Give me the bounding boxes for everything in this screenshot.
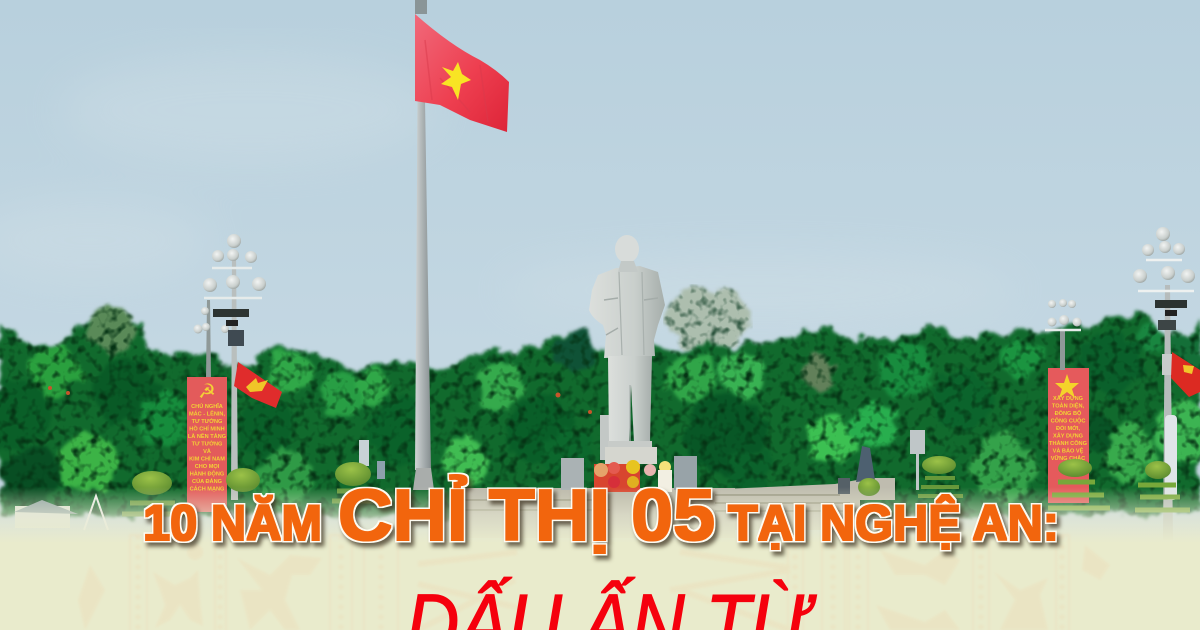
left red flag	[234, 362, 282, 408]
small lamps	[359, 430, 925, 490]
cream lower panel	[0, 542, 1200, 630]
left slogan banner: HỒ CHÍ MINH	[189, 424, 225, 432]
cream fade panel	[0, 487, 1200, 543]
left slogan banner: VÀ	[203, 448, 211, 455]
left slogan banner: HÀNH ĐỘNG	[190, 470, 224, 478]
right slogan banner	[1048, 368, 1089, 503]
right slogan banner: THÀNH CÔNG	[1049, 439, 1087, 447]
flagpole base	[413, 468, 434, 490]
right slogan banner: ĐỔI MỚI,	[1056, 424, 1080, 432]
right slogan banner: TOÀN DIỆN,	[1052, 402, 1085, 410]
title line one	[143, 475, 1059, 556]
left slogan banner: MÁC - LÊNIN,	[189, 410, 225, 418]
flowers at statue base	[594, 460, 672, 492]
deer and bird motifs	[78, 544, 1110, 630]
plaza and steps	[465, 478, 895, 538]
statue of President Ho Chi Minh	[589, 235, 665, 447]
orange blossoms	[48, 386, 592, 446]
left slogan banner: CHO MỌI	[195, 464, 220, 470]
title: 10 năm: 10 NĂM	[143, 495, 322, 551]
pale tree behind statue	[666, 288, 750, 348]
national flag	[415, 14, 509, 132]
topiary trees	[14, 456, 1190, 530]
drum bands	[130, 535, 1069, 630]
left slogan banner: LÀ NỀN TẢNG	[188, 433, 226, 440]
title: tại Nghệ An: TẠI NGHỆ AN:	[728, 495, 1059, 551]
main flagpole	[415, 100, 431, 470]
left slogan banner	[187, 377, 227, 512]
soft clouds	[0, 55, 1020, 325]
title: Chỉ thị 05: CHỈ THỊ 05	[338, 475, 715, 556]
left slogan banner: TƯ TƯỞNG	[192, 418, 222, 425]
small right lamp post	[1045, 299, 1082, 370]
star on banner	[1055, 374, 1079, 398]
right lamp post	[1133, 227, 1195, 540]
right slogan banner: VÀ BẢO VỆ	[1053, 446, 1084, 454]
left slogan banner: KIM CHỈ NAM	[189, 456, 225, 462]
drum band dots	[138, 535, 1062, 630]
small dark statue	[856, 446, 875, 482]
left lamp post	[194, 234, 266, 500]
flag star	[441, 62, 471, 100]
left slogan banner: CÁCH MẠNG	[190, 486, 224, 492]
tree line foliage	[0, 305, 1200, 515]
right slogan banner: CÔNG CUỘC	[1051, 416, 1085, 424]
hammer and sickle: ☭	[198, 381, 216, 403]
left slogan banner: CỦA ĐẢNG	[192, 478, 222, 485]
drum triangles	[418, 552, 790, 630]
left slogan banner: CHỦ NGHĨA	[191, 403, 223, 410]
bronze drum pattern	[78, 535, 1110, 630]
statue plinth and side stones	[561, 415, 697, 490]
flagpole top	[415, 0, 427, 14]
right slogan banner: VỮNG CHẮC	[1051, 454, 1085, 462]
right red flag	[1171, 352, 1200, 397]
right slogan banner: XÂY DỰNG	[1053, 432, 1083, 440]
right slogan banner: ĐỒNG BỘ	[1055, 409, 1082, 417]
right slogan banner: XÂY DỰNG	[1053, 395, 1083, 402]
left slogan banner: TƯ TƯỞNG	[192, 440, 222, 448]
